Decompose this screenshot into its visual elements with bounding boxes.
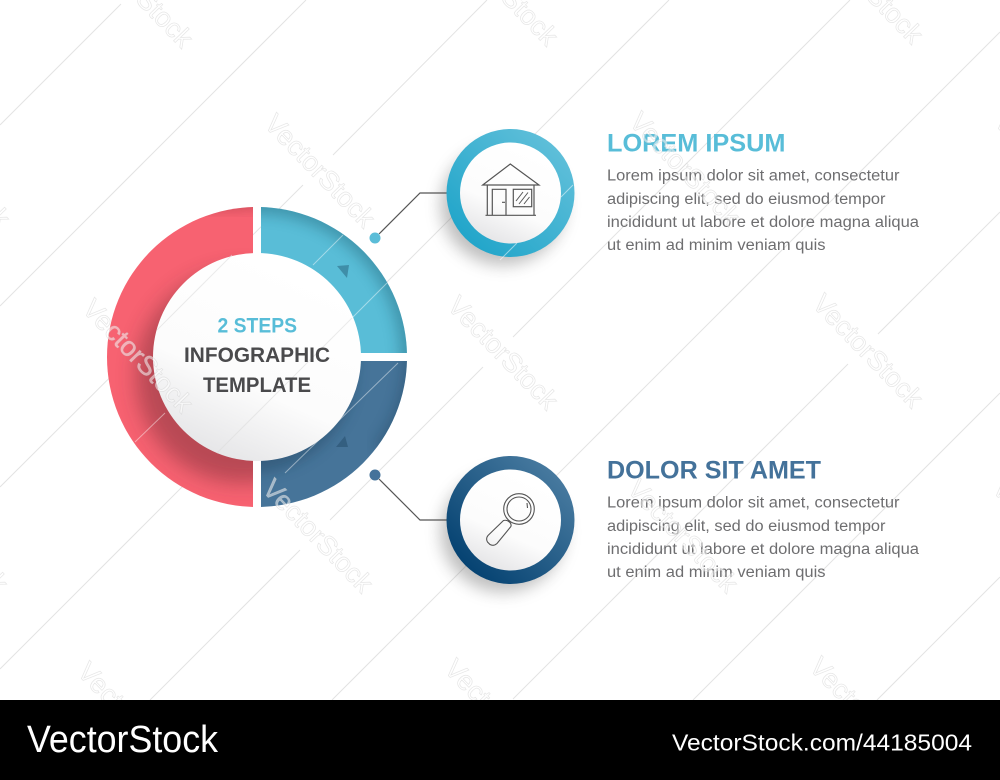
footer image id: VectorStock.com/44185004	[672, 730, 972, 756]
icon: house	[483, 164, 539, 215]
body text: dolor sit amet: Lorem ipsum dolor sit amet, consectetur	[607, 494, 900, 512]
body text: lorem ipsum: Lorem ipsum dolor sit amet, consectetur	[607, 168, 900, 184]
watermark pattern: VectorStock	[439, 653, 561, 779]
body text: dolor sit amet	[607, 494, 919, 581]
footer logo text: VectorStock	[27, 719, 219, 761]
icon: arrow on light blue segment	[337, 265, 349, 278]
connector: top leader line	[370, 193, 448, 244]
watermark pattern: VectorStock	[72, 656, 194, 780]
heading: lorem ipsum: LOREM IPSUM	[607, 130, 786, 158]
watermark pattern: VectorStock	[257, 473, 379, 599]
body text: dolor sit amet: ut enim ad minim veniam quis	[607, 564, 826, 581]
text block: dolor sit amet	[607, 456, 919, 581]
ring segment: dark blue	[261, 361, 407, 507]
watermark pattern: VectorStock	[804, 651, 926, 777]
watermark pattern: VectorStock	[622, 473, 744, 599]
watermark pattern: VectorStock	[259, 108, 381, 234]
body text: lorem ipsum: adipiscing elit, sed do eiusmod tempor	[607, 191, 886, 208]
text: infographic: INFOGRAPHIC	[184, 344, 330, 367]
text: 2 steps: 2 STEPS	[218, 314, 297, 338]
icon: magnifier	[487, 494, 534, 545]
panel: donut ring	[104, 186, 412, 510]
text: template: TEMPLATE	[203, 374, 311, 397]
body text: lorem ipsum: incididunt ut labore et dolore magna aliqua	[607, 214, 919, 231]
watermark pattern: VectorStock	[442, 290, 564, 416]
body text: dolor sit amet: adipiscing elit, sed do eiusmod tempor	[607, 518, 886, 535]
bubble: magnifier step	[441, 456, 574, 592]
connector: bottom leader line	[370, 470, 448, 520]
ring segment: red	[107, 207, 253, 507]
ring segment: light blue	[261, 207, 407, 353]
text block: lorem ipsum	[607, 130, 919, 254]
watermark pattern: VectorStock	[807, 288, 929, 414]
heading: dolor sit amet: DOLOR SIT AMET	[607, 456, 821, 484]
body text: lorem ipsum: ut enim ad minim veniam quis	[607, 237, 826, 254]
panel: center circle	[153, 253, 361, 461]
watermark pattern: VectorStock	[624, 106, 746, 232]
bubble: house step	[441, 129, 574, 265]
body text: dolor sit amet: incididunt ut labore et dolore magna aliqua	[607, 541, 919, 558]
body text: lorem ipsum	[607, 168, 919, 254]
watermark pattern: VectorStock	[77, 293, 199, 419]
footer bar	[0, 700, 1000, 780]
icon: arrow on dark blue segment	[336, 436, 348, 447]
